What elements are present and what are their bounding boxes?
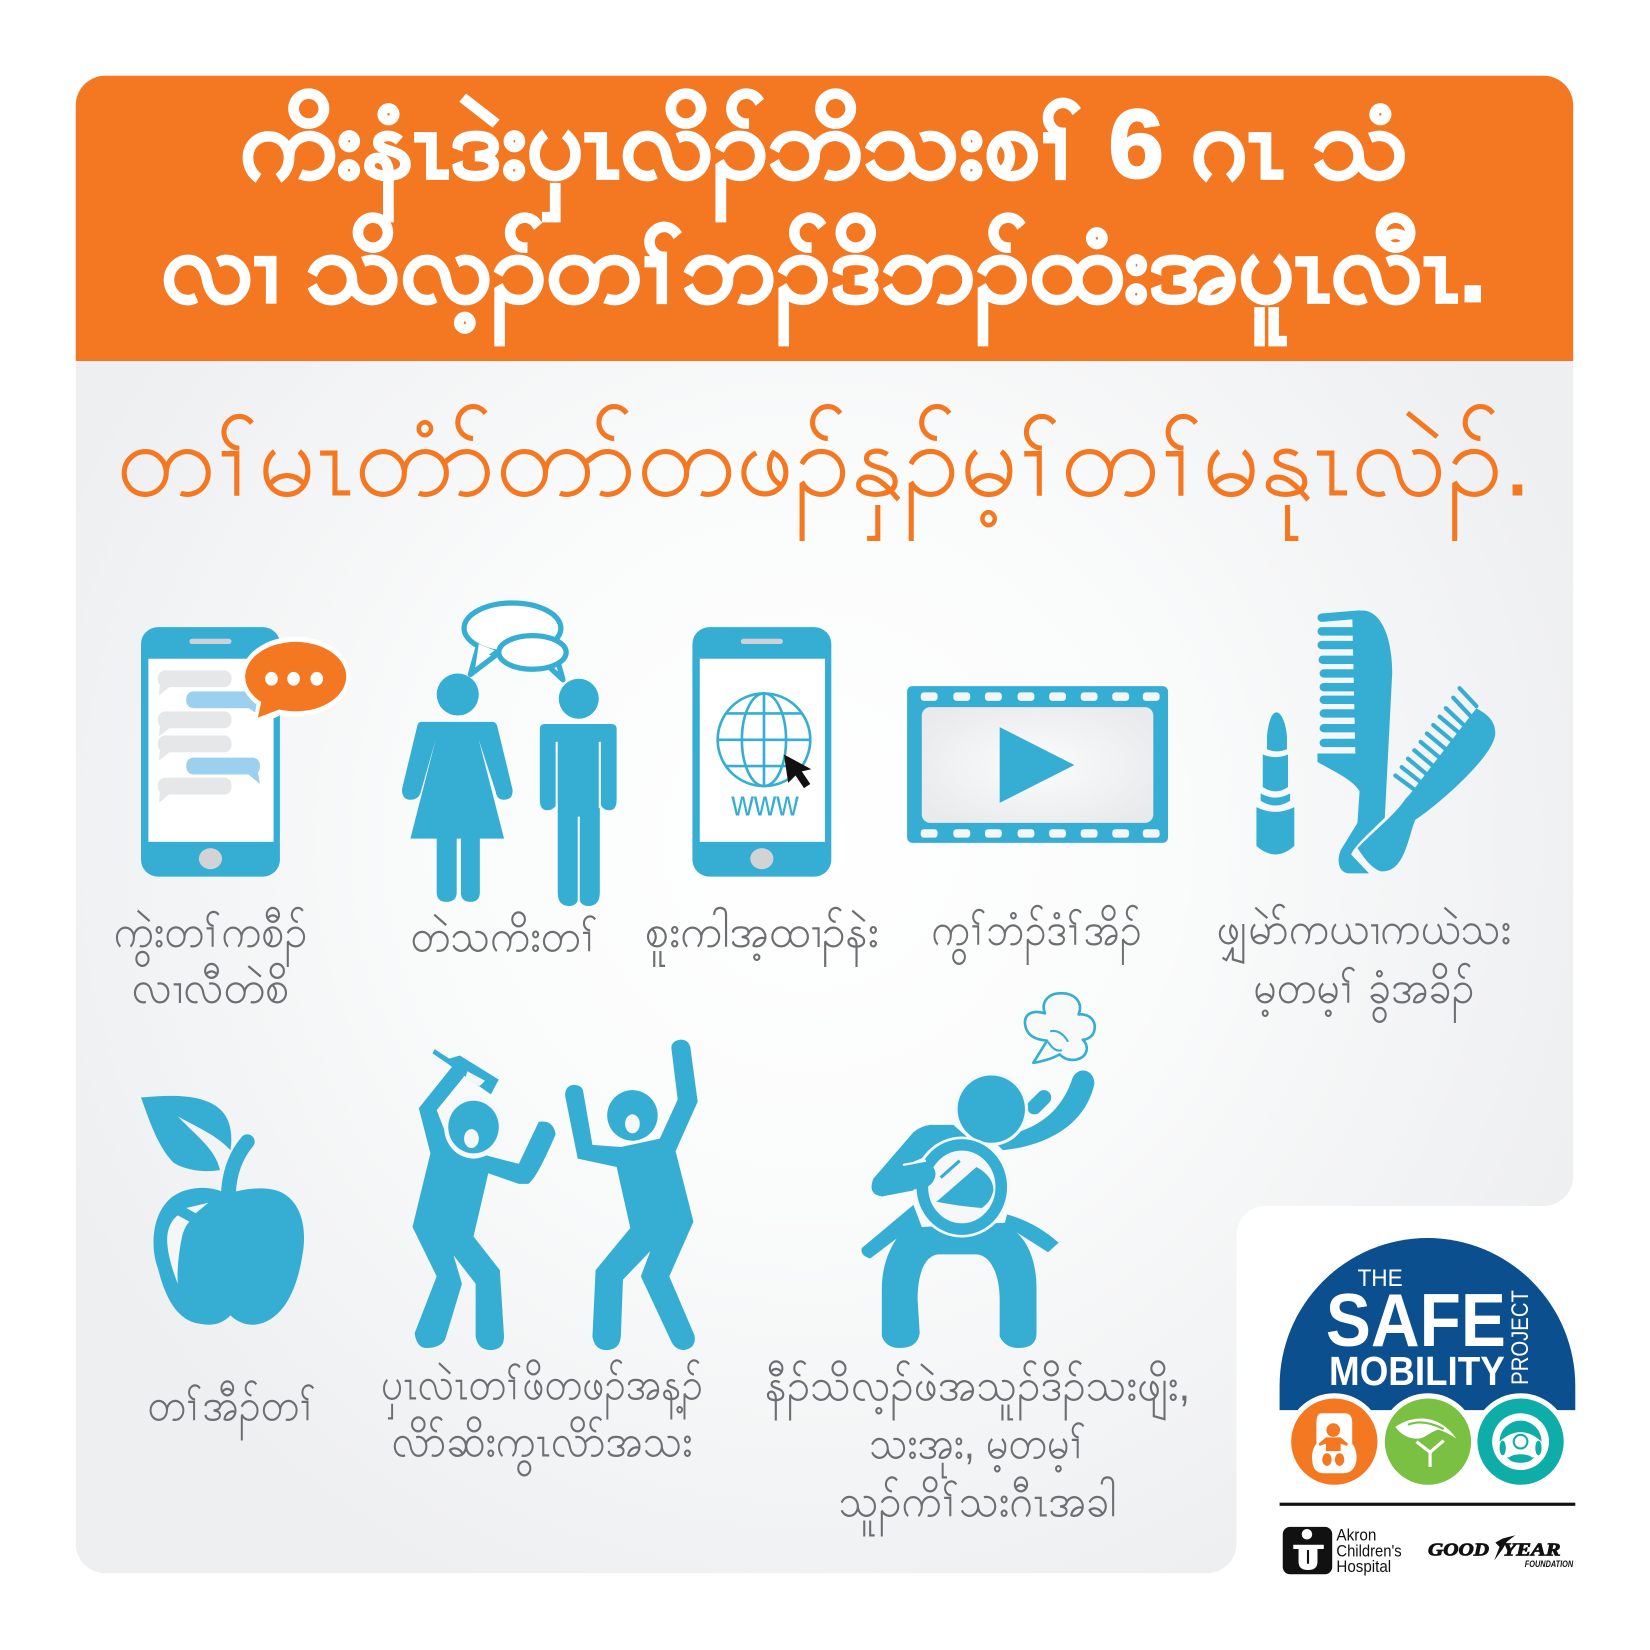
label: fighting: လိာ်ဆိးကွၤလိာ်အသး <box>391 1415 692 1476</box>
title line 2: လၢ သိလ့ၣ်တၢ်ဘၣ်ဒိဘၣ်ထံးအပူၤလီၤ. <box>162 213 1486 346</box>
logo: Goodyear Foundation: FOUNDATION <box>1525 1559 1574 1569</box>
icon: two passengers fighting <box>412 1040 698 1350</box>
logo: Akron Children's Hospital <box>1283 1527 1402 1576</box>
comb teeth <box>1322 615 1476 790</box>
icon: apple <box>141 1096 304 1325</box>
title line 1: ကိးနံၤဒဲးပှၤလိၣ်ဘိသးစၢ် 6 ဂၤ သံ <box>240 89 1408 222</box>
icon: phone browsing the web: www <box>730 784 799 824</box>
logo: The Safe Mobility Project: THE <box>1357 1265 1403 1292</box>
label: angry driver <box>765 1360 1190 1536</box>
label: talking: တဲသကိးတၢ် <box>410 910 598 961</box>
label: browsing internet: စူးကါအ့ထၢၣ်နဲး <box>645 906 879 967</box>
icon: car seat <box>1286 1393 1383 1490</box>
label: fighting <box>381 1359 703 1476</box>
icon: bike helmet <box>1380 1393 1476 1490</box>
logo: The Safe Mobility Project: SAFE <box>1326 1278 1506 1362</box>
logo: Akron Children's Hospital: Children's <box>1336 1542 1402 1560</box>
logo: Akron Children's Hospital: Akron <box>1336 1527 1376 1545</box>
icon: steering wheel <box>1472 1393 1569 1490</box>
label: fighting: ပှၤလဲၤတၢ်ဖိတဖၣ်အန့ၣ် <box>381 1359 703 1420</box>
logo: Akron Children's Hospital: Hospital <box>1336 1558 1391 1576</box>
label: angry driver: သူၣ်ကိၢ်သးဂီၤအခါ <box>839 1475 1116 1536</box>
logo: The Safe Mobility Project: PROJECT <box>1507 1290 1534 1385</box>
logo: The Safe Mobility Project: MOBILITY <box>1329 1348 1505 1394</box>
label: eating: တၢ်အီၣ်တၢ် <box>147 1380 316 1441</box>
icon: angry driver with steering wheel <box>861 993 1095 1348</box>
label: texting: လၢလီတဲစိ <box>132 962 289 1013</box>
label: texting <box>114 906 307 1013</box>
logo: Goodyear Foundation: GOOD <box>1428 1539 1489 1559</box>
logo: The Safe Mobility Project <box>1280 1238 1575 1490</box>
icon: two people talking <box>402 603 617 906</box>
logo: Goodyear Foundation: YEAR <box>1503 1539 1561 1559</box>
icon: lipstick and combs <box>1256 611 1495 873</box>
logo: Goodyear Foundation <box>1428 1535 1574 1569</box>
label: angry driver: သးအုး, မ့တမ့ၢ် <box>869 1417 1086 1478</box>
icon: video film strip <box>907 686 1168 843</box>
panel: orange header <box>76 76 1573 361</box>
icon: phone browsing the web <box>692 627 831 877</box>
label: angry driver: နီၣ်သိလ့ၣ်ဖဲအသူၣ်ဒိၣ်သးဖျိး, <box>765 1360 1190 1422</box>
label: grooming: ဖျှမဲာ်ကယၢကယဲသး <box>1216 903 1511 964</box>
icon: phone with text messages <box>141 627 350 877</box>
label: texting: ကွဲးတၢ်ကစီၣ် <box>114 906 307 967</box>
label: grooming: မ့တမ့ၢ် ခွံအခိၣ် <box>1253 962 1474 1023</box>
label: watching video: ကွၢ်ဘံၣ်ဒံၢ်အိၣ် <box>931 904 1142 965</box>
label: grooming <box>1216 903 1511 1023</box>
panel: grey background <box>76 361 1573 1573</box>
subtitle: တၢ်မၤတံာ်တာ်တဖၣ်နှၣ်မ့ၢ်တၢ်မနုၤလဲၣ်. <box>116 403 1532 541</box>
